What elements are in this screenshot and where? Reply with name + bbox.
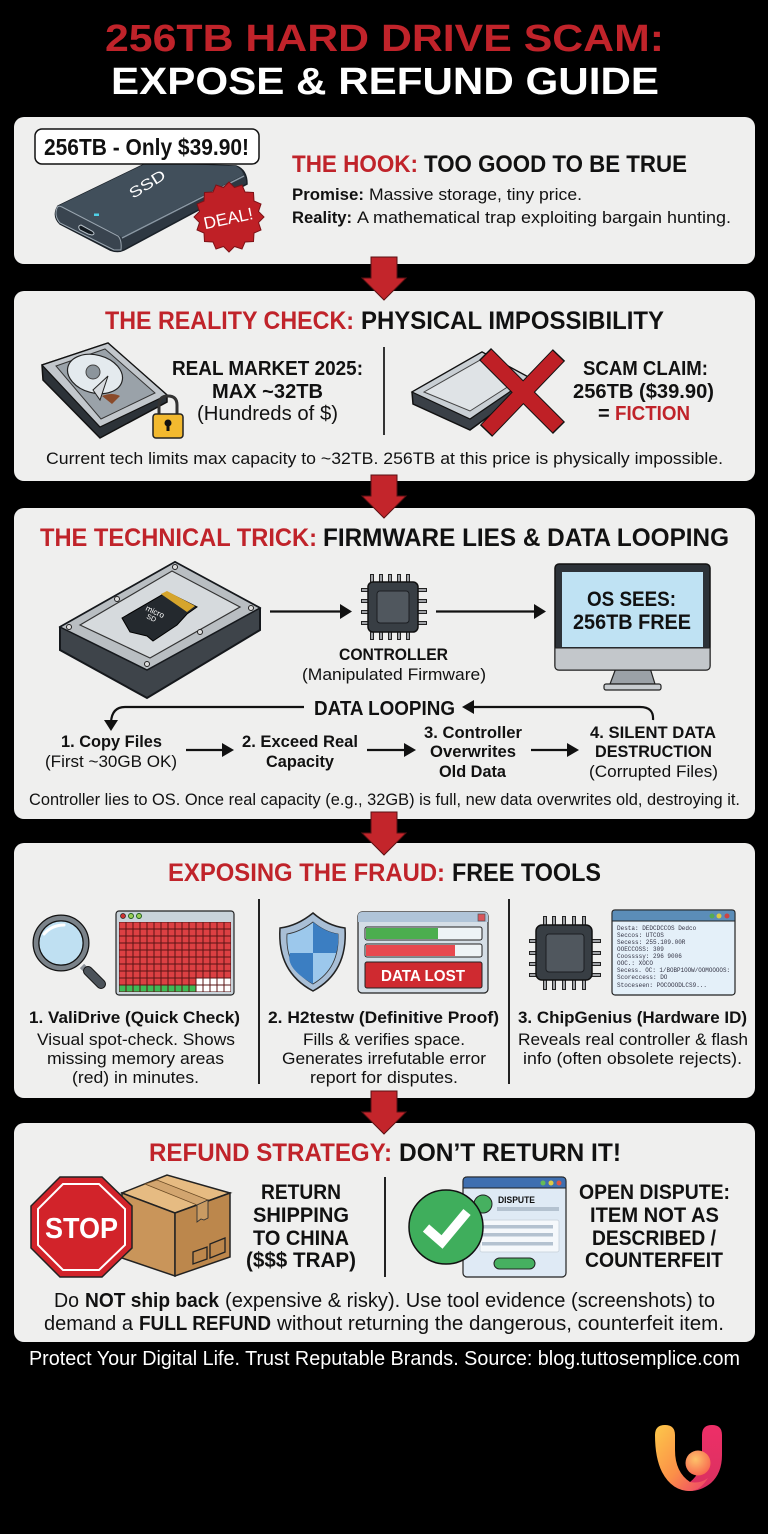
arrow: step three to four <box>531 743 579 757</box>
text: scam claim <box>573 358 714 425</box>
footer text: Protect Your Digital Life. Trust Reputable Brands. Source: blog.tuttosemplice.com <box>29 1348 740 1370</box>
icon: external SSD <box>55 163 247 252</box>
tool: ChipGenius text: info (often obsolete rejects). <box>523 1049 742 1068</box>
text: controller label <box>302 645 486 684</box>
step: exceed capacity: 2. Exceed Real <box>242 733 358 751</box>
text: return shipping: TO CHINA <box>253 1227 349 1250</box>
tool: ValiDrive text: Visual spot-check. Shows <box>37 1030 235 1049</box>
icon: crossed out hard drive <box>412 352 559 431</box>
tool: H2testw text: 2. H2testw (Definitive Proof) <box>268 1008 499 1027</box>
arrow: step two to three <box>367 743 416 757</box>
heading: reality check <box>105 307 664 335</box>
tool: ChipGenius text: 3. ChipGenius (Hardware ID) <box>518 1008 747 1027</box>
heading: technical trick: THE TECHNICAL TRICK: <box>40 524 317 552</box>
icon: stop sign: STOP <box>45 1213 118 1245</box>
text: reality footnote: Current tech limits max capacity to ~32TB. 256TB at this price is physically impossible. <box>46 449 723 468</box>
text: scam claim: 256TB ($39.90) <box>573 381 714 403</box>
panel: technical trick <box>14 508 755 819</box>
badge: price <box>35 129 259 164</box>
icon: ChipGenius window <box>612 910 735 995</box>
icon: H2testw window <box>358 912 488 993</box>
icon: hard drive with microSD card: micro <box>144 604 166 620</box>
arrow: exposing fraud to refund <box>362 1091 406 1134</box>
step: copy files: (First ~30GB OK) <box>45 753 177 771</box>
arrow: reality check to technical trick <box>362 475 406 518</box>
step: silent data destruction: (Corrupted Files) <box>589 763 718 781</box>
icon: ChipGenius window: Coossssy: 296 9006 <box>617 953 682 960</box>
icon: H2testw window: DATA LOST <box>381 968 465 985</box>
text: open dispute: OPEN DISPUTE: <box>579 1181 730 1204</box>
tool: H2testw text <box>268 1008 499 1087</box>
icon: brand logo <box>655 1425 722 1491</box>
icon: shield <box>280 913 345 991</box>
icon: external SSD: SSD <box>126 167 169 202</box>
step: controller overwrites: Overwrites <box>430 743 516 761</box>
text: refund advice: Do <box>54 1290 79 1312</box>
text: refund advice: NOT ship back <box>85 1290 220 1312</box>
heading: exposing the fraud: FREE TOOLS <box>452 859 601 887</box>
arrow: loop back to step one <box>104 707 304 731</box>
text: real market <box>172 358 363 425</box>
icon: controller chip <box>361 574 427 640</box>
step: silent data destruction <box>589 724 718 781</box>
heading: reality check: THE REALITY CHECK: <box>105 307 354 335</box>
title <box>105 18 664 103</box>
panel: exposing the fraud <box>14 843 755 1098</box>
text: open dispute: DESCRIBED / <box>592 1227 716 1250</box>
text: return shipping <box>246 1181 356 1272</box>
icon: green check <box>409 1190 483 1264</box>
icon: ChipGenius window: Desta: DEDCDCCOS Dedco <box>617 925 697 932</box>
text: return shipping: SHIPPING <box>253 1204 349 1227</box>
text: refund advice: FULL REFUND <box>139 1313 271 1335</box>
step: exceed capacity: Capacity <box>266 753 335 771</box>
icon: hard drive with microSD card <box>60 562 260 698</box>
icon: deal starburst <box>194 182 264 252</box>
tool: ValiDrive text: 1. ValiDrive (Quick Check) <box>29 1008 240 1027</box>
icon: ValiDrive results window <box>116 911 234 995</box>
step: copy files <box>45 733 177 771</box>
icon: cardboard box <box>122 1175 230 1276</box>
title: EXPOSE & REFUND GUIDE <box>111 61 659 103</box>
step: exceed capacity <box>242 733 358 771</box>
step: controller overwrites: 3. Controller <box>424 724 523 742</box>
heading: refund strategy <box>149 1139 621 1167</box>
text: technical footnote: Controller lies to OS. Once real capacity (e.g., 32GB) is full, new data overwrites old, destroying it. <box>29 790 740 809</box>
icon: monitor showing 256TB free <box>555 564 710 690</box>
step: silent data destruction: DESTRUCTION <box>595 743 712 761</box>
text: refund advice: (expensive & risky). Use tool evidence (screenshots) to <box>225 1290 715 1312</box>
arrow: hook to reality check <box>362 257 406 300</box>
heading: refund strategy: REFUND STRATEGY: <box>149 1139 392 1167</box>
icon: chip <box>529 916 601 990</box>
text: scam claim: SCAM CLAIM: <box>583 358 708 380</box>
arrow: controller to OS <box>436 604 546 619</box>
text: controller label: (Manipulated Firmware) <box>302 665 486 684</box>
text: return shipping: RETURN <box>261 1181 341 1204</box>
panel: refund strategy <box>14 1123 755 1342</box>
text: scam claim: = <box>598 403 610 425</box>
icon: ChipGenius window: Scoreccess: DO <box>617 974 668 981</box>
icon: ChipGenius window: Secess: 255.109.00R <box>617 939 686 946</box>
text: open dispute: COUNTERFEIT <box>585 1249 723 1272</box>
arrow: step one to two <box>186 743 234 757</box>
step: copy files: 1. Copy Files <box>61 733 162 751</box>
text: refund advice <box>44 1290 724 1335</box>
icon: ChipGenius window: Secess. OC: 1/BOBP1OOW/OOMOOOOS: <box>617 967 730 974</box>
heading: technical trick <box>40 524 729 552</box>
tool: ValiDrive text: (red) in minutes. <box>72 1068 199 1087</box>
text: refund advice: without returning the dangerous, counterfeit item. <box>276 1313 724 1335</box>
icon: monitor showing 256TB free: OS SEES: <box>587 588 676 611</box>
text: refund advice: demand a <box>44 1313 134 1335</box>
step: controller overwrites <box>424 724 523 781</box>
title: 256TB HARD DRIVE SCAM: <box>105 18 664 60</box>
arrow: technical trick to exposing fraud <box>362 812 406 855</box>
icon: padlock <box>153 396 183 438</box>
heading: reality check: PHYSICAL IMPOSSIBILITY <box>361 307 664 335</box>
tool: H2testw text: Generates irrefutable error <box>282 1049 486 1068</box>
icon: locked hard drive <box>42 343 167 438</box>
text: promise and reality: Promise: <box>292 185 364 204</box>
label: data looping: DATA LOOPING <box>314 698 455 720</box>
tool: ValiDrive text: missing memory areas <box>47 1049 224 1068</box>
tool: H2testw text: report for disputes. <box>310 1068 458 1087</box>
text: real market: MAX ~32TB <box>212 381 323 403</box>
tool: H2testw text: Fills & verifies space. <box>303 1030 465 1049</box>
text: promise and reality: Reality: <box>292 208 352 227</box>
heading: the hook: THE HOOK: <box>292 151 418 178</box>
step: silent data destruction: 4. SILENT DATA <box>590 724 716 742</box>
text: promise and reality: Massive storage, tiny price. <box>369 185 582 204</box>
arrow: loop from step four <box>462 700 653 720</box>
icon: dispute window: DISPUTE <box>498 1195 535 1205</box>
tool: ValiDrive text <box>29 1008 240 1087</box>
heading: the hook: TOO GOOD TO BE TRUE <box>424 151 687 178</box>
icon: magnifying glass <box>36 918 101 984</box>
badge: price: 256TB - Only $39.90! <box>44 134 249 160</box>
text: open dispute <box>579 1181 730 1272</box>
icon: hard drive with microSD card: SD <box>145 613 157 624</box>
heading: technical trick: FIRMWARE LIES & DATA LOOPING <box>323 524 729 552</box>
panel: reality check <box>14 291 755 481</box>
text: return shipping: ($$$ TRAP) <box>246 1249 356 1272</box>
text: promise and reality <box>292 185 731 227</box>
tool: ChipGenius text: Reveals real controller & flash <box>518 1030 748 1049</box>
tool: ChipGenius text <box>518 1008 748 1068</box>
heading: refund strategy: DON’T RETURN IT! <box>399 1139 621 1167</box>
heading: the hook <box>292 151 687 178</box>
icon: stop sign <box>31 1177 132 1277</box>
icon: ChipGenius window: Stoceseen: POCOOODLCS9... <box>617 982 707 989</box>
text: promise and reality: A mathematical trap exploiting bargain hunting. <box>357 208 731 227</box>
icon: monitor showing 256TB free: 256TB FREE <box>573 611 691 634</box>
heading: exposing the fraud: EXPOSING THE FRAUD: <box>168 859 445 887</box>
text: real market: (Hundreds of $) <box>197 403 338 425</box>
text: scam claim: FICTION <box>615 403 690 425</box>
step: controller overwrites: Old Data <box>439 763 507 781</box>
icon: ChipGenius window: Seccos: UTCOS <box>617 932 664 939</box>
icon: dispute window <box>463 1177 566 1277</box>
icon: deal starburst: DEAL! <box>202 204 255 233</box>
panel: the hook <box>14 117 755 264</box>
icon: ChipGenius window: OOC.: XOCO <box>617 960 653 967</box>
heading: exposing the fraud <box>168 859 601 887</box>
text: controller label: CONTROLLER <box>339 645 448 664</box>
text: open dispute: ITEM NOT AS <box>590 1204 719 1227</box>
icon: ChipGenius window: OOECCOSS: 309 <box>617 946 664 953</box>
text: real market: REAL MARKET 2025: <box>172 358 363 380</box>
arrow: drive to controller <box>270 604 352 619</box>
